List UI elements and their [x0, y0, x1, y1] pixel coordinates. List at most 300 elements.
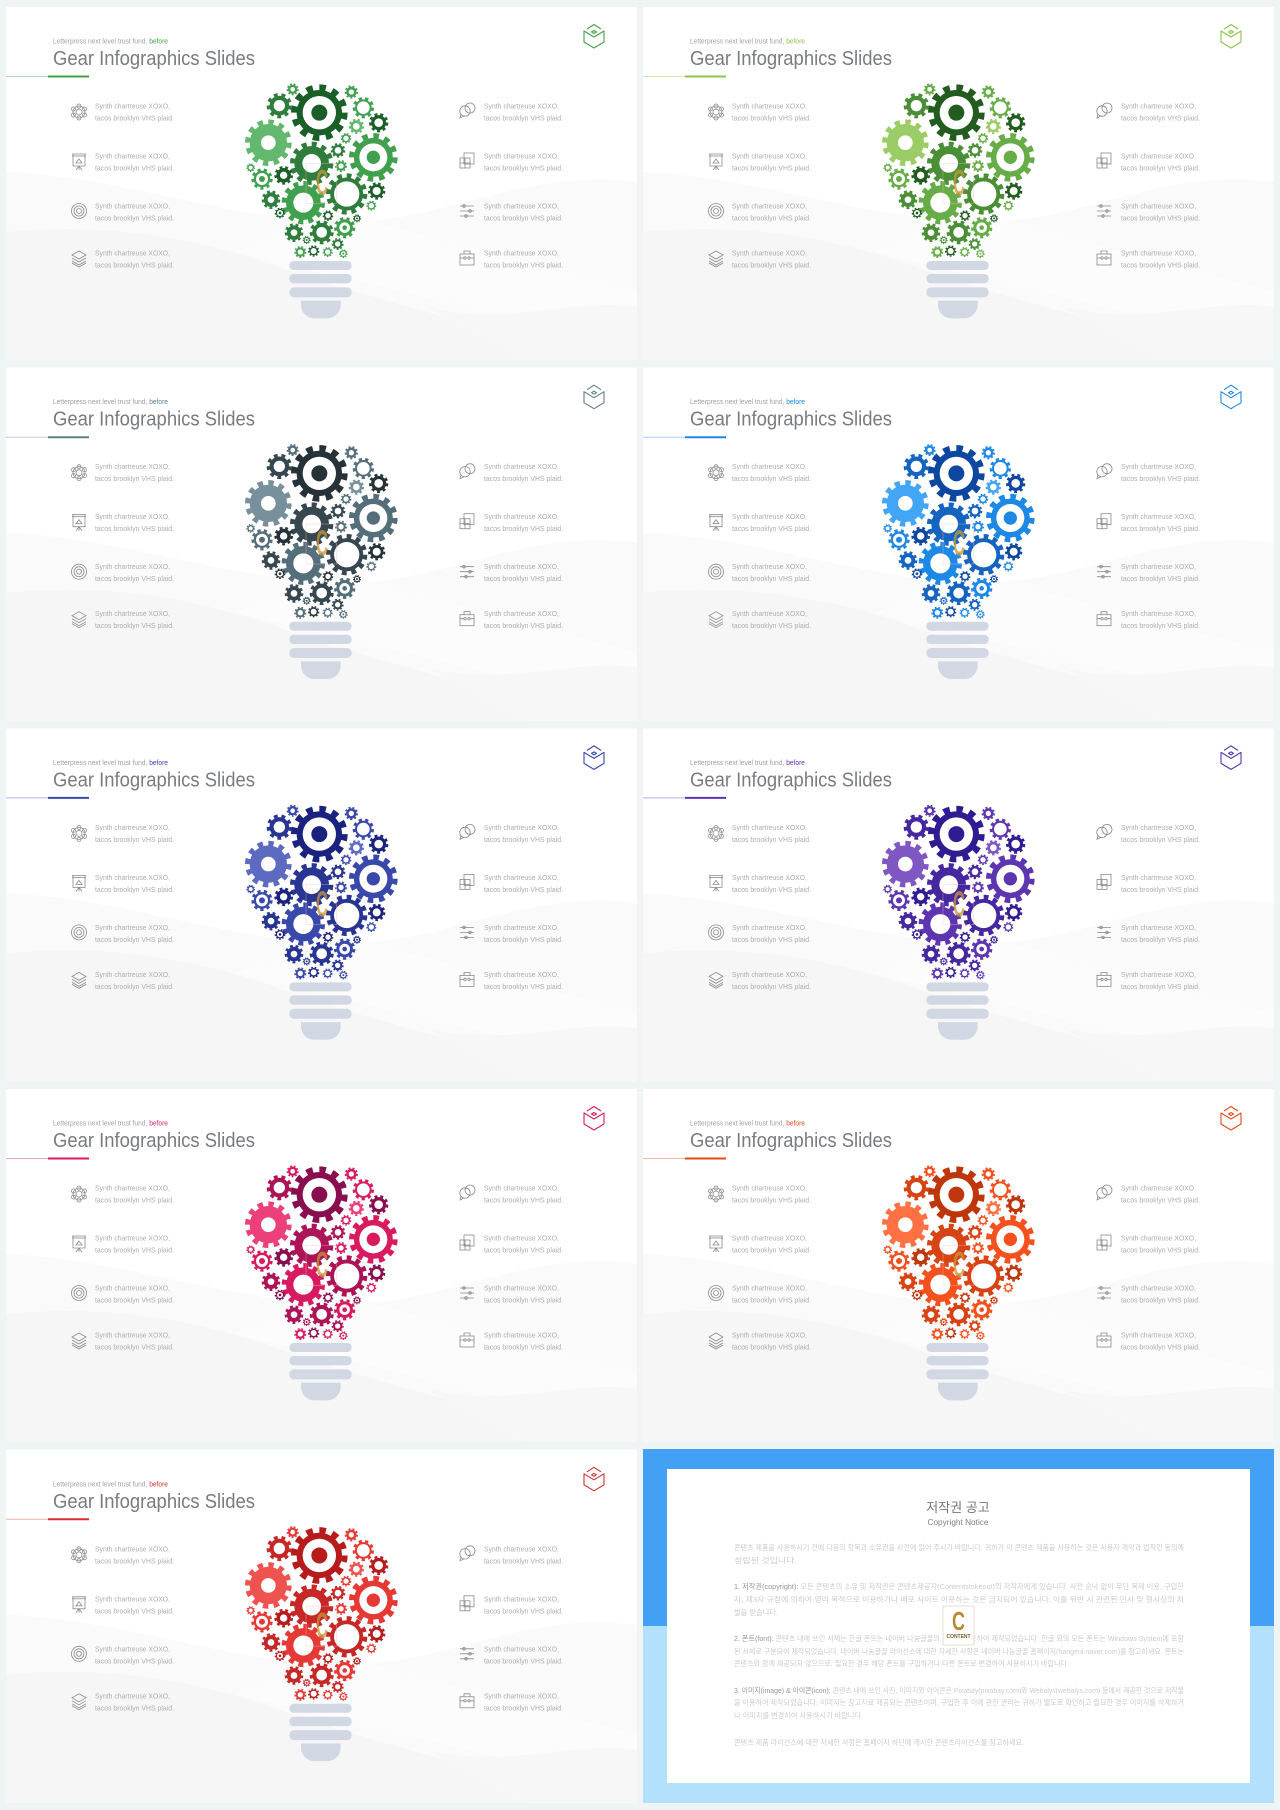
gear light bulb — [884, 445, 1032, 679]
title underline — [643, 436, 726, 438]
gear light bulb: C — [953, 523, 965, 564]
right item 4: tacos brooklyn VHS plaid. — [484, 1342, 563, 1352]
closing line: 콘텐츠 제품 라이선스에 대한 자세한 사항은 홈페이지 하단에 게시한 콘텐츠라이선스를 참고하세요. — [734, 1737, 1024, 1747]
left item 3: tacos brooklyn VHS plaid. — [95, 1656, 174, 1665]
gear light bulb: C — [953, 1244, 965, 1285]
left item 3: Synth chartreuse XOXO, — [732, 202, 807, 210]
right item 2: Synth chartreuse XOXO, — [1121, 152, 1196, 160]
left item 4: tacos brooklyn VHS plaid. — [95, 1342, 174, 1352]
right item 2: tacos brooklyn VHS plaid. — [484, 885, 563, 894]
icon: cube logo — [1221, 1106, 1241, 1130]
left item 2 — [709, 512, 811, 533]
right item 1: tacos brooklyn VHS plaid. — [484, 835, 563, 844]
title: Gear Infographics Slides — [53, 48, 255, 70]
header subtitle: Letterpress next level trust fund, before — [53, 1479, 168, 1488]
right item 1: Synth chartreuse XOXO, — [484, 102, 559, 110]
icon: cube logo — [1221, 24, 1241, 48]
right item 3: Synth chartreuse XOXO, — [1121, 1284, 1196, 1292]
left item 1: tacos brooklyn VHS plaid. — [95, 1196, 174, 1204]
right item 1: Synth chartreuse XOXO, — [1121, 823, 1196, 832]
right item 3: Synth chartreuse XOXO, — [484, 1644, 559, 1653]
left item 2: tacos brooklyn VHS plaid. — [95, 164, 174, 172]
left item 1: tacos brooklyn VHS plaid. — [732, 114, 811, 122]
right item 3 — [460, 923, 563, 944]
right item 3 — [460, 562, 563, 583]
right item 1 — [460, 102, 563, 122]
right item 2 — [1097, 512, 1200, 533]
left item 4: Synth chartreuse XOXO, — [732, 248, 807, 258]
title: Gear Infographics Slides — [690, 769, 892, 791]
copyright heading: 저작권 공고 — [926, 1500, 990, 1515]
slide: green — [6, 7, 637, 360]
panel: copyright notice — [643, 1449, 1274, 1803]
left item 2: Synth chartreuse XOXO, — [732, 512, 807, 521]
right item 2 — [460, 152, 563, 172]
right item 1: Synth chartreuse XOXO, — [484, 1184, 559, 1192]
icon: cube logo — [584, 1467, 604, 1491]
slide: orange — [643, 1089, 1274, 1442]
slide: indigo — [6, 728, 637, 1081]
paragraph 3: image and icon: 3. 이미지(image) & 아이콘(icon): 콘텐츠 내에 쓰인 사진, 이미지와 아이콘은 Pixabay(pixabay.com)와 Webalys(webalys.com) 등에서 제공한 것으로 저작물 — [734, 1685, 1184, 1695]
header subtitle: Letterpress next level trust fund, before — [690, 36, 805, 46]
slide: pink — [6, 1089, 637, 1442]
left item 3: Synth chartreuse XOXO, — [95, 562, 170, 571]
gear light bulb — [247, 445, 395, 679]
right item 1 — [460, 823, 563, 844]
right item 2: tacos brooklyn VHS plaid. — [484, 524, 563, 533]
left item 2: Synth chartreuse XOXO, — [732, 1234, 807, 1242]
left item 4: tacos brooklyn VHS plaid. — [732, 260, 811, 270]
watermark logo: C — [952, 1606, 965, 1636]
slide: light green — [643, 7, 1274, 360]
title underline — [6, 436, 89, 438]
left item 1: Synth chartreuse XOXO, — [95, 1184, 170, 1192]
slide: slate — [6, 368, 637, 721]
paragraph 2: font: 콘텐츠와 함께 제공되지 않으므로, 필요한 경우 해당 폰트를 구입하거나 다른 폰트로 변경하여 사용하시기 바랍니다. — [734, 1658, 1069, 1668]
paragraph 2: font: 2. 폰트(font): 콘텐츠 내에 쓰인 서체는 한글 폰트는 네이버 나눔글꼴의 서체를 사용하여 제작되었습니다. 한글 외의 모든 폰트는 Windows System에 포함 — [734, 1633, 1184, 1643]
left item 2: Synth chartreuse XOXO, — [95, 873, 170, 882]
header subtitle: Letterpress next level trust fund, before — [53, 758, 168, 767]
left item 1: tacos brooklyn VHS plaid. — [732, 474, 811, 483]
right item 3 — [1097, 923, 1200, 944]
left item 4: Synth chartreuse XOXO, — [95, 1330, 170, 1340]
right item 1 — [1097, 823, 1200, 844]
right item 4 — [1097, 970, 1200, 991]
left item 3: Synth chartreuse XOXO, — [95, 1644, 170, 1653]
right item 1: tacos brooklyn VHS plaid. — [484, 114, 563, 122]
right item 2 — [1097, 873, 1200, 894]
right item 3 — [1097, 202, 1200, 222]
title: Gear Infographics Slides — [690, 1130, 892, 1152]
left item 1 — [72, 823, 174, 844]
right item 1: Synth chartreuse XOXO, — [1121, 1184, 1196, 1192]
right item 4: tacos brooklyn VHS plaid. — [484, 982, 563, 991]
left item 4: Synth chartreuse XOXO, — [95, 1691, 170, 1700]
title underline — [643, 1158, 726, 1160]
right item 2: tacos brooklyn VHS plaid. — [1121, 164, 1200, 172]
right item 2: Synth chartreuse XOXO, — [1121, 512, 1196, 521]
right item 4 — [1097, 248, 1200, 270]
left item 3: tacos brooklyn VHS plaid. — [732, 574, 811, 583]
slide: red — [6, 1450, 637, 1803]
right item 1: Synth chartreuse XOXO, — [484, 823, 559, 832]
left item 3 — [72, 562, 174, 583]
left item 1: Synth chartreuse XOXO, — [95, 1544, 170, 1553]
right item 2: Synth chartreuse XOXO, — [484, 873, 559, 882]
right item 1: tacos brooklyn VHS plaid. — [1121, 474, 1200, 483]
right item 1 — [1097, 102, 1200, 122]
icon: cube logo — [584, 746, 604, 769]
left item 3 — [72, 202, 174, 222]
title: Gear Infographics Slides — [690, 409, 892, 431]
left item 1: tacos brooklyn VHS plaid. — [95, 1556, 174, 1565]
right item 1: Synth chartreuse XOXO, — [484, 462, 559, 471]
left item 4: Synth chartreuse XOXO, — [732, 1330, 807, 1340]
intro paragraph: 성립된 것입니다. — [734, 1555, 797, 1565]
gear light bulb — [247, 1166, 395, 1400]
right item 3: tacos brooklyn VHS plaid. — [484, 574, 563, 583]
left item 4: Synth chartreuse XOXO, — [95, 970, 170, 979]
left item 1: tacos brooklyn VHS plaid. — [95, 114, 174, 122]
right item 3: Synth chartreuse XOXO, — [1121, 923, 1196, 932]
right item 1: tacos brooklyn VHS plaid. — [484, 1196, 563, 1204]
right item 4: Synth chartreuse XOXO, — [484, 970, 559, 979]
right item 4 — [460, 248, 563, 270]
paragraph 1: copyright — [734, 1581, 1184, 1617]
left item 4 — [709, 970, 811, 991]
left item 1 — [708, 102, 811, 122]
right item 3 — [460, 1284, 563, 1304]
paragraph 1: copyright: 벌을 받습니다. — [734, 1607, 778, 1617]
title underline — [6, 1158, 89, 1160]
left item 2: Synth chartreuse XOXO, — [95, 1594, 170, 1603]
gear light bulb — [247, 805, 395, 1040]
right item 4: tacos brooklyn VHS plaid. — [484, 621, 563, 630]
right item 3: tacos brooklyn VHS plaid. — [1121, 1296, 1200, 1304]
right item 3: tacos brooklyn VHS plaid. — [1121, 574, 1200, 583]
left item 2 — [709, 152, 811, 172]
left item 2: Synth chartreuse XOXO, — [732, 152, 807, 160]
right item 2 — [460, 1594, 563, 1615]
gear light bulb — [247, 1527, 395, 1761]
right item 4 — [1097, 609, 1200, 630]
right item 2: Synth chartreuse XOXO, — [484, 512, 559, 521]
left item 2: tacos brooklyn VHS plaid. — [732, 885, 811, 894]
right item 3: Synth chartreuse XOXO, — [1121, 202, 1196, 210]
gear light bulb: C — [953, 162, 965, 203]
left item 3 — [708, 923, 811, 944]
right item 4 — [460, 970, 563, 991]
left item 1: Synth chartreuse XOXO, — [732, 823, 807, 832]
slide: purple — [643, 728, 1274, 1081]
right item 3 — [1097, 1284, 1200, 1304]
right item 2: tacos brooklyn VHS plaid. — [484, 1246, 563, 1254]
left item 4: tacos brooklyn VHS plaid. — [95, 982, 174, 991]
left item 4: tacos brooklyn VHS plaid. — [95, 621, 174, 630]
left item 4: Synth chartreuse XOXO, — [732, 970, 807, 979]
right item 3: tacos brooklyn VHS plaid. — [484, 1656, 563, 1665]
right item 2: tacos brooklyn VHS plaid. — [1121, 524, 1200, 533]
right item 2 — [460, 512, 563, 533]
icon: cube logo — [584, 24, 604, 48]
right item 4: tacos brooklyn VHS plaid. — [1121, 621, 1200, 630]
header subtitle: Letterpress next level trust fund, before — [53, 36, 168, 46]
left item 3 — [708, 202, 811, 222]
left item 4 — [709, 609, 811, 630]
paragraph 2: font — [734, 1633, 1184, 1668]
right item 1: Synth chartreuse XOXO, — [1121, 462, 1196, 471]
right item 1 — [460, 1544, 563, 1565]
left item 1 — [72, 1184, 174, 1204]
left item 1: Synth chartreuse XOXO, — [732, 1184, 807, 1192]
left item 3: Synth chartreuse XOXO, — [95, 202, 170, 210]
left item 3: tacos brooklyn VHS plaid. — [95, 1296, 174, 1304]
right item 2: Synth chartreuse XOXO, — [484, 1594, 559, 1603]
left item 2: tacos brooklyn VHS plaid. — [95, 1606, 174, 1615]
gear light bulb: C — [316, 1244, 328, 1285]
left item 4 — [72, 970, 174, 991]
paragraph 1: copyright: 자, 제3자 규정에 의하여 영리 목적으로 이용하거나 배포 사이트 이용하는 것은 금지되어 있습니다. 이를 위반 시 관련된 민사 및 형사상의 처 — [734, 1594, 1184, 1604]
left item 4: tacos brooklyn VHS plaid. — [732, 982, 811, 991]
left item 4: Synth chartreuse XOXO, — [732, 609, 807, 618]
right item 4 — [1097, 1330, 1200, 1352]
left item 1: tacos brooklyn VHS plaid. — [95, 835, 174, 844]
left item 2: tacos brooklyn VHS plaid. — [732, 524, 811, 533]
gear light bulb — [884, 805, 1032, 1040]
right item 2 — [1097, 1234, 1200, 1254]
left item 4 — [72, 1330, 174, 1352]
left item 4: tacos brooklyn VHS plaid. — [732, 1342, 811, 1352]
right item 1 — [1097, 1184, 1200, 1204]
left item 4: Synth chartreuse XOXO, — [95, 248, 170, 258]
right item 2: Synth chartreuse XOXO, — [484, 1234, 559, 1242]
left item 1 — [708, 823, 811, 844]
right item 1: tacos brooklyn VHS plaid. — [1121, 114, 1200, 122]
right item 4: Synth chartreuse XOXO, — [484, 609, 559, 618]
title: Gear Infographics Slides — [53, 769, 255, 791]
left item 1: Synth chartreuse XOXO, — [95, 823, 170, 832]
left item 3: Synth chartreuse XOXO, — [732, 1284, 807, 1292]
left item 4: tacos brooklyn VHS plaid. — [95, 260, 174, 270]
left item 4: tacos brooklyn VHS plaid. — [95, 1703, 174, 1712]
right item 1: tacos brooklyn VHS plaid. — [1121, 1196, 1200, 1204]
left item 2 — [72, 1594, 174, 1615]
right item 3 — [460, 1644, 563, 1665]
left item 1: Synth chartreuse XOXO, — [95, 102, 170, 110]
right item 3: tacos brooklyn VHS plaid. — [1121, 214, 1200, 222]
paragraph 1: copyright: 1. 저작권(copyright): 모든 콘텐츠의 소유 및 저작권은 콘텐츠제공자(Contentstokeout)의 저작자에게 있습니다. 사전 승낙 없이 무단 복제 이용, 구입한 — [734, 1581, 1184, 1591]
right item 1 — [460, 462, 563, 483]
right item 3 — [460, 202, 563, 222]
title underline — [6, 76, 89, 78]
title: Gear Infographics Slides — [53, 1130, 255, 1152]
left item 3: tacos brooklyn VHS plaid. — [95, 574, 174, 583]
right item 2: tacos brooklyn VHS plaid. — [1121, 1246, 1200, 1254]
left item 1: Synth chartreuse XOXO, — [95, 462, 170, 471]
left item 2: Synth chartreuse XOXO, — [95, 1234, 170, 1242]
right item 3: Synth chartreuse XOXO, — [484, 1284, 559, 1292]
paragraph 3: image and icon: 을 이용하여 제작되었습니다. 이미지는 참고자료 제공되는 콘텐츠이며, 구입한 후 이에 관한 권리는 귀하가 별도로 확인하고 필요한 경우 이미지를 삭제하거 — [734, 1697, 1184, 1707]
right item 1: tacos brooklyn VHS plaid. — [484, 1556, 563, 1565]
right item 2: tacos brooklyn VHS plaid. — [484, 1606, 563, 1615]
icon: cube logo — [1221, 385, 1241, 409]
title underline — [643, 76, 726, 78]
right item 4 — [460, 1330, 563, 1352]
right item 2: Synth chartreuse XOXO, — [1121, 1234, 1196, 1242]
right item 1 — [460, 1184, 563, 1204]
intro paragraph: 콘텐츠 제품을 사용하시기 전에 다음의 항목과 소유권을 사전에 읽어 주시기 바랍니다. 귀하가 이 콘텐츠 제품을 사용하는 것은 사용자 계약과 법적인 동의에 — [734, 1542, 1184, 1552]
right item 1: Synth chartreuse XOXO, — [484, 1544, 559, 1553]
left item 2: tacos brooklyn VHS plaid. — [95, 524, 174, 533]
right item 4 — [460, 609, 563, 630]
title underline — [643, 797, 726, 799]
gear light bulb — [884, 84, 1032, 318]
gear light bulb: C — [316, 523, 328, 564]
left item 4: Synth chartreuse XOXO, — [95, 609, 170, 618]
watermark logo — [943, 1606, 974, 1645]
right item 4: tacos brooklyn VHS plaid. — [1121, 982, 1200, 991]
left item 1 — [708, 1184, 811, 1204]
left item 2: Synth chartreuse XOXO, — [95, 512, 170, 521]
gear light bulb: C — [316, 1605, 328, 1646]
right item 2: Synth chartreuse XOXO, — [484, 152, 559, 160]
left item 3: tacos brooklyn VHS plaid. — [732, 214, 811, 222]
left item 2: tacos brooklyn VHS plaid. — [732, 164, 811, 172]
left item 1: Synth chartreuse XOXO, — [732, 462, 807, 471]
title: Gear Infographics Slides — [53, 1491, 255, 1513]
icon: cube logo — [1221, 746, 1241, 769]
left item 2: tacos brooklyn VHS plaid. — [95, 1246, 174, 1254]
left item 4 — [72, 1691, 174, 1712]
gear light bulb — [884, 1166, 1032, 1400]
right item 4: tacos brooklyn VHS plaid. — [1121, 1342, 1200, 1352]
left item 2: Synth chartreuse XOXO, — [95, 152, 170, 160]
header subtitle: Letterpress next level trust fund, before — [53, 397, 168, 406]
right item 2 — [460, 873, 563, 894]
left item 3: Synth chartreuse XOXO, — [95, 923, 170, 932]
left item 3: tacos brooklyn VHS plaid. — [732, 935, 811, 944]
right item 4: Synth chartreuse XOXO, — [1121, 970, 1196, 979]
gear light bulb: C — [953, 883, 965, 924]
left item 3: tacos brooklyn VHS plaid. — [95, 935, 174, 944]
right item 4: Synth chartreuse XOXO, — [1121, 248, 1196, 258]
right item 1: tacos brooklyn VHS plaid. — [1121, 835, 1200, 844]
left item 1: tacos brooklyn VHS plaid. — [732, 1196, 811, 1204]
left item 1 — [72, 462, 174, 483]
left item 2: Synth chartreuse XOXO, — [732, 873, 807, 882]
right item 2 — [460, 1234, 563, 1254]
left item 2 — [72, 873, 174, 894]
left item 3: tacos brooklyn VHS plaid. — [95, 214, 174, 222]
right item 4: tacos brooklyn VHS plaid. — [484, 260, 563, 270]
right item 3: tacos brooklyn VHS plaid. — [484, 935, 563, 944]
left item 3 — [72, 1284, 174, 1304]
left item 3 — [72, 1644, 174, 1665]
right item 3: tacos brooklyn VHS plaid. — [484, 1296, 563, 1304]
left item 1: Synth chartreuse XOXO, — [732, 102, 807, 110]
right item 3: Synth chartreuse XOXO, — [484, 202, 559, 210]
right item 4: tacos brooklyn VHS plaid. — [1121, 260, 1200, 270]
left item 2 — [72, 512, 174, 533]
right item 1: tacos brooklyn VHS plaid. — [484, 474, 563, 483]
gear light bulb: C — [316, 162, 328, 203]
left item 4 — [709, 248, 811, 270]
icon: cube logo — [584, 385, 604, 409]
left item 2 — [72, 1234, 174, 1254]
right item 4: tacos brooklyn VHS plaid. — [484, 1703, 563, 1712]
right item 2: Synth chartreuse XOXO, — [1121, 873, 1196, 882]
paragraph 3: image and icon: 나 이미지를 변경하여 사용하시기 바랍니다. — [734, 1710, 863, 1720]
left item 1: tacos brooklyn VHS plaid. — [732, 835, 811, 844]
right item 4: Synth chartreuse XOXO, — [484, 1330, 559, 1340]
left item 1 — [72, 102, 174, 122]
right item 3: Synth chartreuse XOXO, — [484, 562, 559, 571]
right item 4: Synth chartreuse XOXO, — [484, 1691, 559, 1700]
copyright subheading: Copyright Notice — [928, 1517, 989, 1527]
title: Gear Infographics Slides — [53, 409, 255, 431]
left item 3: Synth chartreuse XOXO, — [95, 1284, 170, 1292]
right item 4 — [460, 1691, 563, 1712]
right item 1: Synth chartreuse XOXO, — [1121, 102, 1196, 110]
right item 3: tacos brooklyn VHS plaid. — [484, 214, 563, 222]
intro paragraph — [734, 1542, 1184, 1565]
gear light bulb — [247, 84, 395, 318]
watermark logo: CONTENT — [946, 1634, 970, 1640]
left item 3: Synth chartreuse XOXO, — [732, 923, 807, 932]
right item 2: tacos brooklyn VHS plaid. — [1121, 885, 1200, 894]
right item 3: Synth chartreuse XOXO, — [484, 923, 559, 932]
header subtitle: Letterpress next level trust fund, before — [690, 1118, 805, 1128]
header subtitle: Letterpress next level trust fund, before — [690, 397, 805, 406]
left item 3: tacos brooklyn VHS plaid. — [732, 1296, 811, 1304]
left item 2: tacos brooklyn VHS plaid. — [732, 1246, 811, 1254]
left item 1 — [72, 1544, 174, 1565]
header subtitle: Letterpress next level trust fund, before — [53, 1118, 168, 1128]
icon: cube logo — [584, 1106, 604, 1130]
right item 4: Synth chartreuse XOXO, — [484, 248, 559, 258]
title underline — [6, 1518, 89, 1520]
left item 2 — [709, 873, 811, 894]
left item 1 — [708, 462, 811, 483]
left item 4 — [709, 1330, 811, 1352]
paragraph 3: image and icon — [734, 1685, 1184, 1720]
right item 3: Synth chartreuse XOXO, — [1121, 562, 1196, 571]
paragraph 2: font: 된 서체로 구분되어 제작되었습니다. 네이버 나눔글꼴 라이선스에 대한 자세한 사항은 네이버 나눔글꼴 홈페이지(hangeul.naver.com)를 참고하세요. 폰트는 — [734, 1646, 1184, 1656]
left item 3 — [708, 562, 811, 583]
right item 3 — [1097, 562, 1200, 583]
left item 2: tacos brooklyn VHS plaid. — [95, 885, 174, 894]
right item 2 — [1097, 152, 1200, 172]
left item 4: tacos brooklyn VHS plaid. — [732, 621, 811, 630]
right item 4: Synth chartreuse XOXO, — [1121, 1330, 1196, 1340]
right item 2: tacos brooklyn VHS plaid. — [484, 164, 563, 172]
header subtitle: Letterpress next level trust fund, before — [690, 758, 805, 767]
left item 3 — [708, 1284, 811, 1304]
left item 3 — [72, 923, 174, 944]
left item 4 — [72, 609, 174, 630]
title: Gear Infographics Slides — [690, 48, 892, 70]
gear light bulb: C — [316, 883, 328, 924]
right item 4: Synth chartreuse XOXO, — [1121, 609, 1196, 618]
left item 2 — [72, 152, 174, 172]
right item 1 — [1097, 462, 1200, 483]
right item 3: tacos brooklyn VHS plaid. — [1121, 935, 1200, 944]
left item 1: tacos brooklyn VHS plaid. — [95, 474, 174, 483]
slide: blue — [643, 368, 1274, 721]
left item 4 — [72, 248, 174, 270]
left item 3: Synth chartreuse XOXO, — [732, 562, 807, 571]
title underline — [6, 797, 89, 799]
